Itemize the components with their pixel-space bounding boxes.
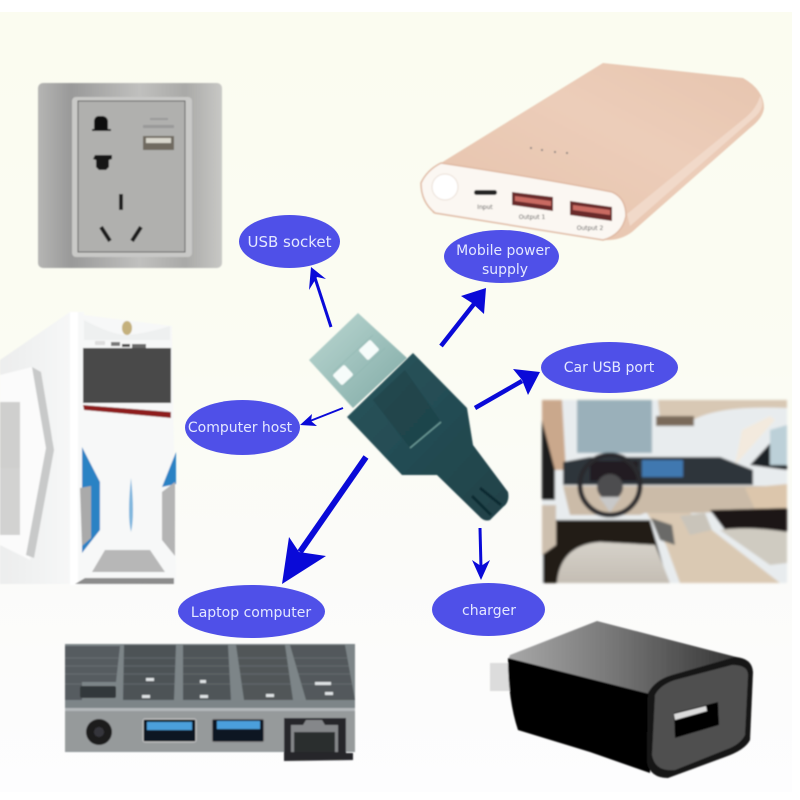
arrow: to computer host xyxy=(300,408,343,426)
photo: mobile power bank: Output 1 xyxy=(519,214,545,221)
photo: mobile power bank xyxy=(421,63,764,240)
label: Computer host: Computer host xyxy=(188,420,293,436)
arrow: to mobile power supply xyxy=(441,288,486,346)
label: Mobile power supply: supply xyxy=(482,262,528,278)
label: Car USB port xyxy=(541,342,678,393)
photo: mobile power bank: Output 2 xyxy=(577,225,603,232)
label: Laptop computer: Laptop computer xyxy=(191,605,311,621)
arrow: to USB socket xyxy=(309,267,331,327)
label: USB socket: USB socket xyxy=(247,233,332,251)
USB plug xyxy=(309,313,508,520)
photo: car interior xyxy=(542,400,787,583)
photo: USB phone charger xyxy=(490,621,753,778)
metal shell xyxy=(309,313,407,408)
photo: mobile power bank: Input xyxy=(477,204,493,211)
label: charger: charger xyxy=(462,603,516,619)
photo: wall socket with USB port xyxy=(38,83,222,268)
arrow: to laptop computer xyxy=(282,457,366,584)
photo: computer host tower xyxy=(0,312,176,585)
label: USB socket xyxy=(239,215,340,268)
label: Computer host xyxy=(185,400,300,455)
arrow: to charger xyxy=(472,528,490,580)
label: charger xyxy=(432,583,545,636)
label: Car USB port: Car USB port xyxy=(564,360,655,376)
label: Mobile power supply xyxy=(444,230,559,283)
photo: laptop ports xyxy=(65,644,355,761)
label: Laptop computer xyxy=(178,585,325,638)
plug body xyxy=(347,353,508,520)
arrow: to car USB port xyxy=(475,369,540,408)
label: Mobile power supply: Mobile power xyxy=(456,243,550,259)
